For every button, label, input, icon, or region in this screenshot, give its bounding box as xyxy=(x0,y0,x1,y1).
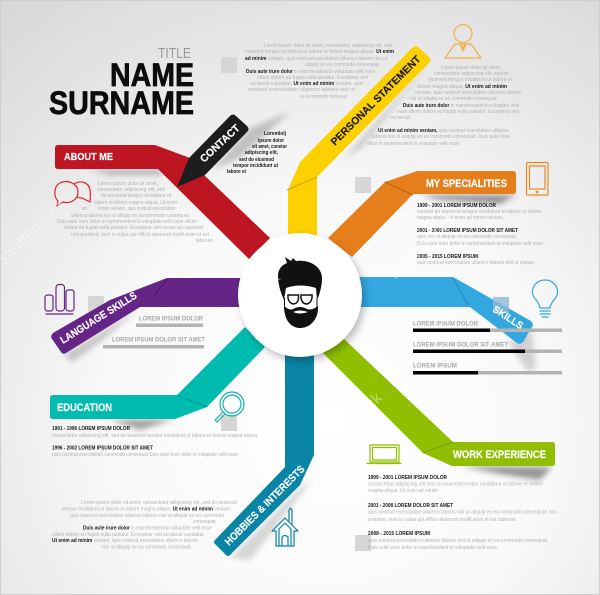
text: contact: tempor incididunt ut xyxy=(233,163,278,169)
label: language skills: LANGUAGE SKILLS xyxy=(58,290,139,347)
text: work experience timeline: quis nostrud exercitation ullamco laboris nisi ut aliquip ex ea commodo consequat xyxy=(368,538,547,544)
text: work experience timeline: 2001 - 2008 LOREM DOLOR SIT AMET xyxy=(368,503,454,509)
icon: magnifier xyxy=(215,392,244,422)
text: hobbies: Duis aute irure dolor in reprehenderit in voluptate velit esse xyxy=(83,526,212,532)
text: personal statement left xyxy=(245,43,394,100)
ribbon shadows xyxy=(64,62,552,560)
text: work experience timeline: 1999 - 2001 LOREM IPSUM DOLOR xyxy=(368,475,447,481)
text: specialities timeline: consed do eiusmod tempor incididunt ut labore et dolore xyxy=(417,209,542,215)
text: education timeline: consectetur adipiscing elit, sed do eiusmod tempor incididunt ut labore et dolore magna aliqua xyxy=(52,433,258,439)
label: skills: SKILLS xyxy=(490,304,525,332)
watermark squares xyxy=(88,57,371,551)
text: work experience timeline: consectetur adipiscing elit sed do eiusmod tempor incididunt ut labore et dolore xyxy=(368,482,543,488)
text: about me: non proident, sunt in culpa qui officia deserunt mollit anim id est xyxy=(71,232,209,238)
chart: language skills bars: LOREM IPSUM DOLOR SIT AMET xyxy=(112,336,205,344)
text: work experience timeline: proident, sunt in culpa qui officia deserunt mollit anim id est laborum. xyxy=(368,517,517,523)
chart: language skills bars xyxy=(103,316,205,348)
watermark text xyxy=(0,194,460,463)
text: work experience timeline xyxy=(368,475,557,551)
text: personal statement left: ad minim veniam, quis nostrud exercitation ullamco laboris nisi ut xyxy=(245,56,387,62)
watermark text: shutterstock xyxy=(386,209,460,283)
text: about me: laborum. xyxy=(196,238,214,244)
text: personal statement right: dolore magna aliqua. Ut enim ad minim xyxy=(417,84,507,90)
text: personal statement left: Duis aute irure dolor in reprehenderit in voluptate velit esse xyxy=(246,69,375,75)
text: personal statement right xyxy=(367,65,521,147)
arm: education (teal) xyxy=(50,327,265,419)
text: hobbies: nisi ut aliquip ex ea commodo consequat. xyxy=(102,544,192,550)
text: contact: ipsum dolor xyxy=(258,138,285,144)
text: personal statement left: Lorem ipsum dolor sit amet, consectetur adipiscing elit, sed xyxy=(264,43,392,49)
label: personal statement: PERSONAL STATEMENT xyxy=(329,53,424,148)
text: hobbies: cillum dolore eu fugiat nulla pariatur. Excepteur sint occaecat cupidatat. xyxy=(52,532,205,538)
text: personal statement right: Duis aute irure dolor in reprehenderit in voluptate velit xyxy=(403,103,519,109)
text: about me: dolore eu fugiat nulla pariatur. Excepteur sint occaecat cupidatat xyxy=(64,225,203,231)
centre circle shadow xyxy=(241,237,365,361)
text: personal statement left: cillum dolore eu fugiat nulla pariatur. Excepteur sint xyxy=(257,75,368,81)
heading: title and name: SURNAME xyxy=(49,85,194,121)
text: contact: labore et xyxy=(227,169,246,175)
text: contact: sit amet, conetur xyxy=(252,144,288,150)
text: personal statement right: Ut enim ad minim veniam, quis nostrud exercitation ullamco xyxy=(378,128,509,134)
icon: house xyxy=(272,508,298,546)
text: personal statement right: veniam, quis nostrud exercitation ullamco laboris xyxy=(415,90,521,96)
icon: bearded face xyxy=(278,257,322,328)
arm: about me (red) xyxy=(55,145,270,259)
text: education timeline: 1996 - 2002 LOREM IPSUM DOLOR SIT AMET xyxy=(52,446,154,452)
arm: language skills (purple) xyxy=(51,278,250,354)
label: about me: ABOUT ME xyxy=(64,151,113,163)
text: about me: consectetur adipiscing elit, sed xyxy=(97,187,165,193)
text: work experience timeline: magna aliqua. Ut enim ad minim xyxy=(368,488,438,494)
text: contact: adipiscing elit, xyxy=(245,150,278,156)
icon: light bulb xyxy=(532,280,558,317)
text: personal statement right: nisi ut aliquip ex ea commodo consequat. xyxy=(409,96,498,102)
text: personal statement right: Lorem ipsum dolor sit amet, xyxy=(441,65,501,71)
chart: skills bars: LOREM IPSUM DOLOR xyxy=(413,320,478,328)
icon: tablet xyxy=(526,162,548,195)
text: personal statement right: consectetur adipiscing elit, sed do xyxy=(434,71,509,77)
text: education timeline xyxy=(52,426,258,458)
text: personal statement left: ex ea commodo consequat xyxy=(300,94,347,100)
text: specialities timeline: quis nisi ut aliquip ex ea commodo consequat. xyxy=(417,234,517,240)
text: work experience timeline: quis nostrud exercitation ullamco laboris nisi ut aliquip ex ea commodo consequat, non xyxy=(368,510,557,516)
text: specialities timeline: 1999 - 2001 LOREM IPSUM DOLOR xyxy=(417,203,496,209)
text: specialities timeline: 2001 - 2005 LOREM IPSUM DOLOR SIT AMET xyxy=(417,228,519,234)
heading: title and name xyxy=(49,45,194,121)
text: contact xyxy=(227,131,288,175)
icon: bar chart xyxy=(45,284,74,314)
text: education timeline: quis nostrud exercitation commodo consequat Duis aute irure dolor in voluptate velit esse xyxy=(52,452,238,458)
text: about me: ullamco laboris nisi ut aliquip ex ea commodo consequat. xyxy=(71,213,190,219)
arm: personal statement (yellow) xyxy=(287,46,430,240)
text: personal statement left: aliquip ex ea commodo consequat. xyxy=(305,62,380,68)
chart: skills bars xyxy=(413,320,562,374)
label: work experience: WORK EXPERIENCE xyxy=(453,449,546,461)
text: personal statement right: dolor in reprehenderit in voluptate velit esse xyxy=(367,141,459,147)
arm: work experience (green) xyxy=(323,338,555,466)
chart: language skills bars: LOREM IPSUM DOLOR xyxy=(139,316,203,322)
text: about me: ad xyxy=(82,206,87,212)
arm: hobbies and interests (petrol blue) xyxy=(214,340,314,556)
arm: skills (blue) xyxy=(345,277,533,344)
text: education timeline: 1991 - 1996 LOREM IPSUM DOLOR xyxy=(52,426,130,432)
icon: laptop xyxy=(367,445,401,464)
text: contact: sed do eiusmod xyxy=(239,157,274,163)
text: personal statement right: esse cillum dolore eu fugiat nulla pariatur. Excepteur sint xyxy=(397,109,519,115)
text: personal statement right: laboris nisi ut aliquip ex ea commodo consequat. Duis aute irure xyxy=(372,134,510,140)
text: hobbies xyxy=(52,500,237,550)
text: specialities timeline: magna aliqua. Ut enim ad minim veniam, xyxy=(417,215,504,221)
text: personal statement right: eiusmod tempor incididunt ut labore et xyxy=(428,77,512,83)
text: about me: minim veniam, quis nostrud exercitation xyxy=(98,206,175,212)
text: work experience timeline: Duis aute irure dolor in reprehenderit in voluptate velit esse xyxy=(368,545,497,551)
text: personal statement left: nostrud exercitation ullamco laboris nisi ut xyxy=(248,87,355,93)
watermark on ribbon xyxy=(493,297,509,313)
arm: my specialities (orange) xyxy=(328,171,516,257)
text: about me: labore et dolore magna aliqua. Ut enim xyxy=(94,200,177,206)
text: specialities timeline xyxy=(417,203,543,266)
watermark text: shutterstock xyxy=(313,389,387,463)
chart: skills bars: LOREM IPSUM DOLOR SIT AMET xyxy=(413,342,508,348)
heading: title and name: TITLE xyxy=(158,45,191,62)
text: about me: Lorem ipsum dolor sit amet, xyxy=(98,181,158,187)
label: contact: CONTACT xyxy=(198,122,243,165)
text: hobbies: Ut enim ad minim veniam, quis nostrud exercitation ullamco laboris xyxy=(52,538,198,544)
text: work experience timeline: 2008 - 2015 LOREM IPSUM xyxy=(368,531,430,537)
text: about me xyxy=(57,181,214,244)
text: hobbies: Lorem ipsum dolor sit amet, consectetur adipiscing elit, sed do eiusmod xyxy=(81,500,237,506)
chart: skills bars: LOREM IPSUM xyxy=(413,362,457,370)
text: hobbies: quis nostrud exercitation ullamco laboris nisi ut aliquip ex ea commodo xyxy=(70,513,224,519)
icon: speech bubbles xyxy=(55,182,90,206)
text: specialities timeline: Duis aute irure dolor in reprehenderit in voluptate velit esse xyxy=(417,241,543,247)
arm: contact (black) xyxy=(177,114,248,187)
text: personal statement left: eiusmod tempor incididunt ut labore et dolore magna aliqua. Ut enim xyxy=(245,49,394,55)
label: my specialities: MY SPECIALITIES xyxy=(426,178,507,190)
text: personal statement right: occaecat xyxy=(390,115,410,121)
heading: title and name: NAME xyxy=(110,57,194,93)
label: hobbies and interests: HOBBIES & INTERESTS xyxy=(223,463,307,548)
text: hobbies: tempor incididunt ut labore et dolore magna aliqua. Ut enim ad minim veniam xyxy=(62,506,230,512)
icon: person xyxy=(445,24,481,58)
text: hobbies: consequat. xyxy=(193,519,217,525)
text: specialities timeline: 2005 - 2015 LOREM IPSUM xyxy=(417,254,478,260)
centre circle xyxy=(238,233,362,357)
text: specialities timeline: quis nostrud exercitation ullamco laboris nisi ut aliquip xyxy=(417,260,534,266)
text: about me: Duis aute irure dolor in reprehenderit in voluptate velit esse cillum xyxy=(57,219,197,225)
text: contact: Loremlolj xyxy=(264,131,286,137)
text: personal statement left: occaecat cupidatat. Ut enim ad minim veniam, quis xyxy=(250,81,363,87)
text: about me: do eiusmod tempor incididunt ut xyxy=(101,193,171,199)
watermark text: shutterstock xyxy=(211,269,285,343)
label: education: EDUCATION xyxy=(57,402,112,414)
